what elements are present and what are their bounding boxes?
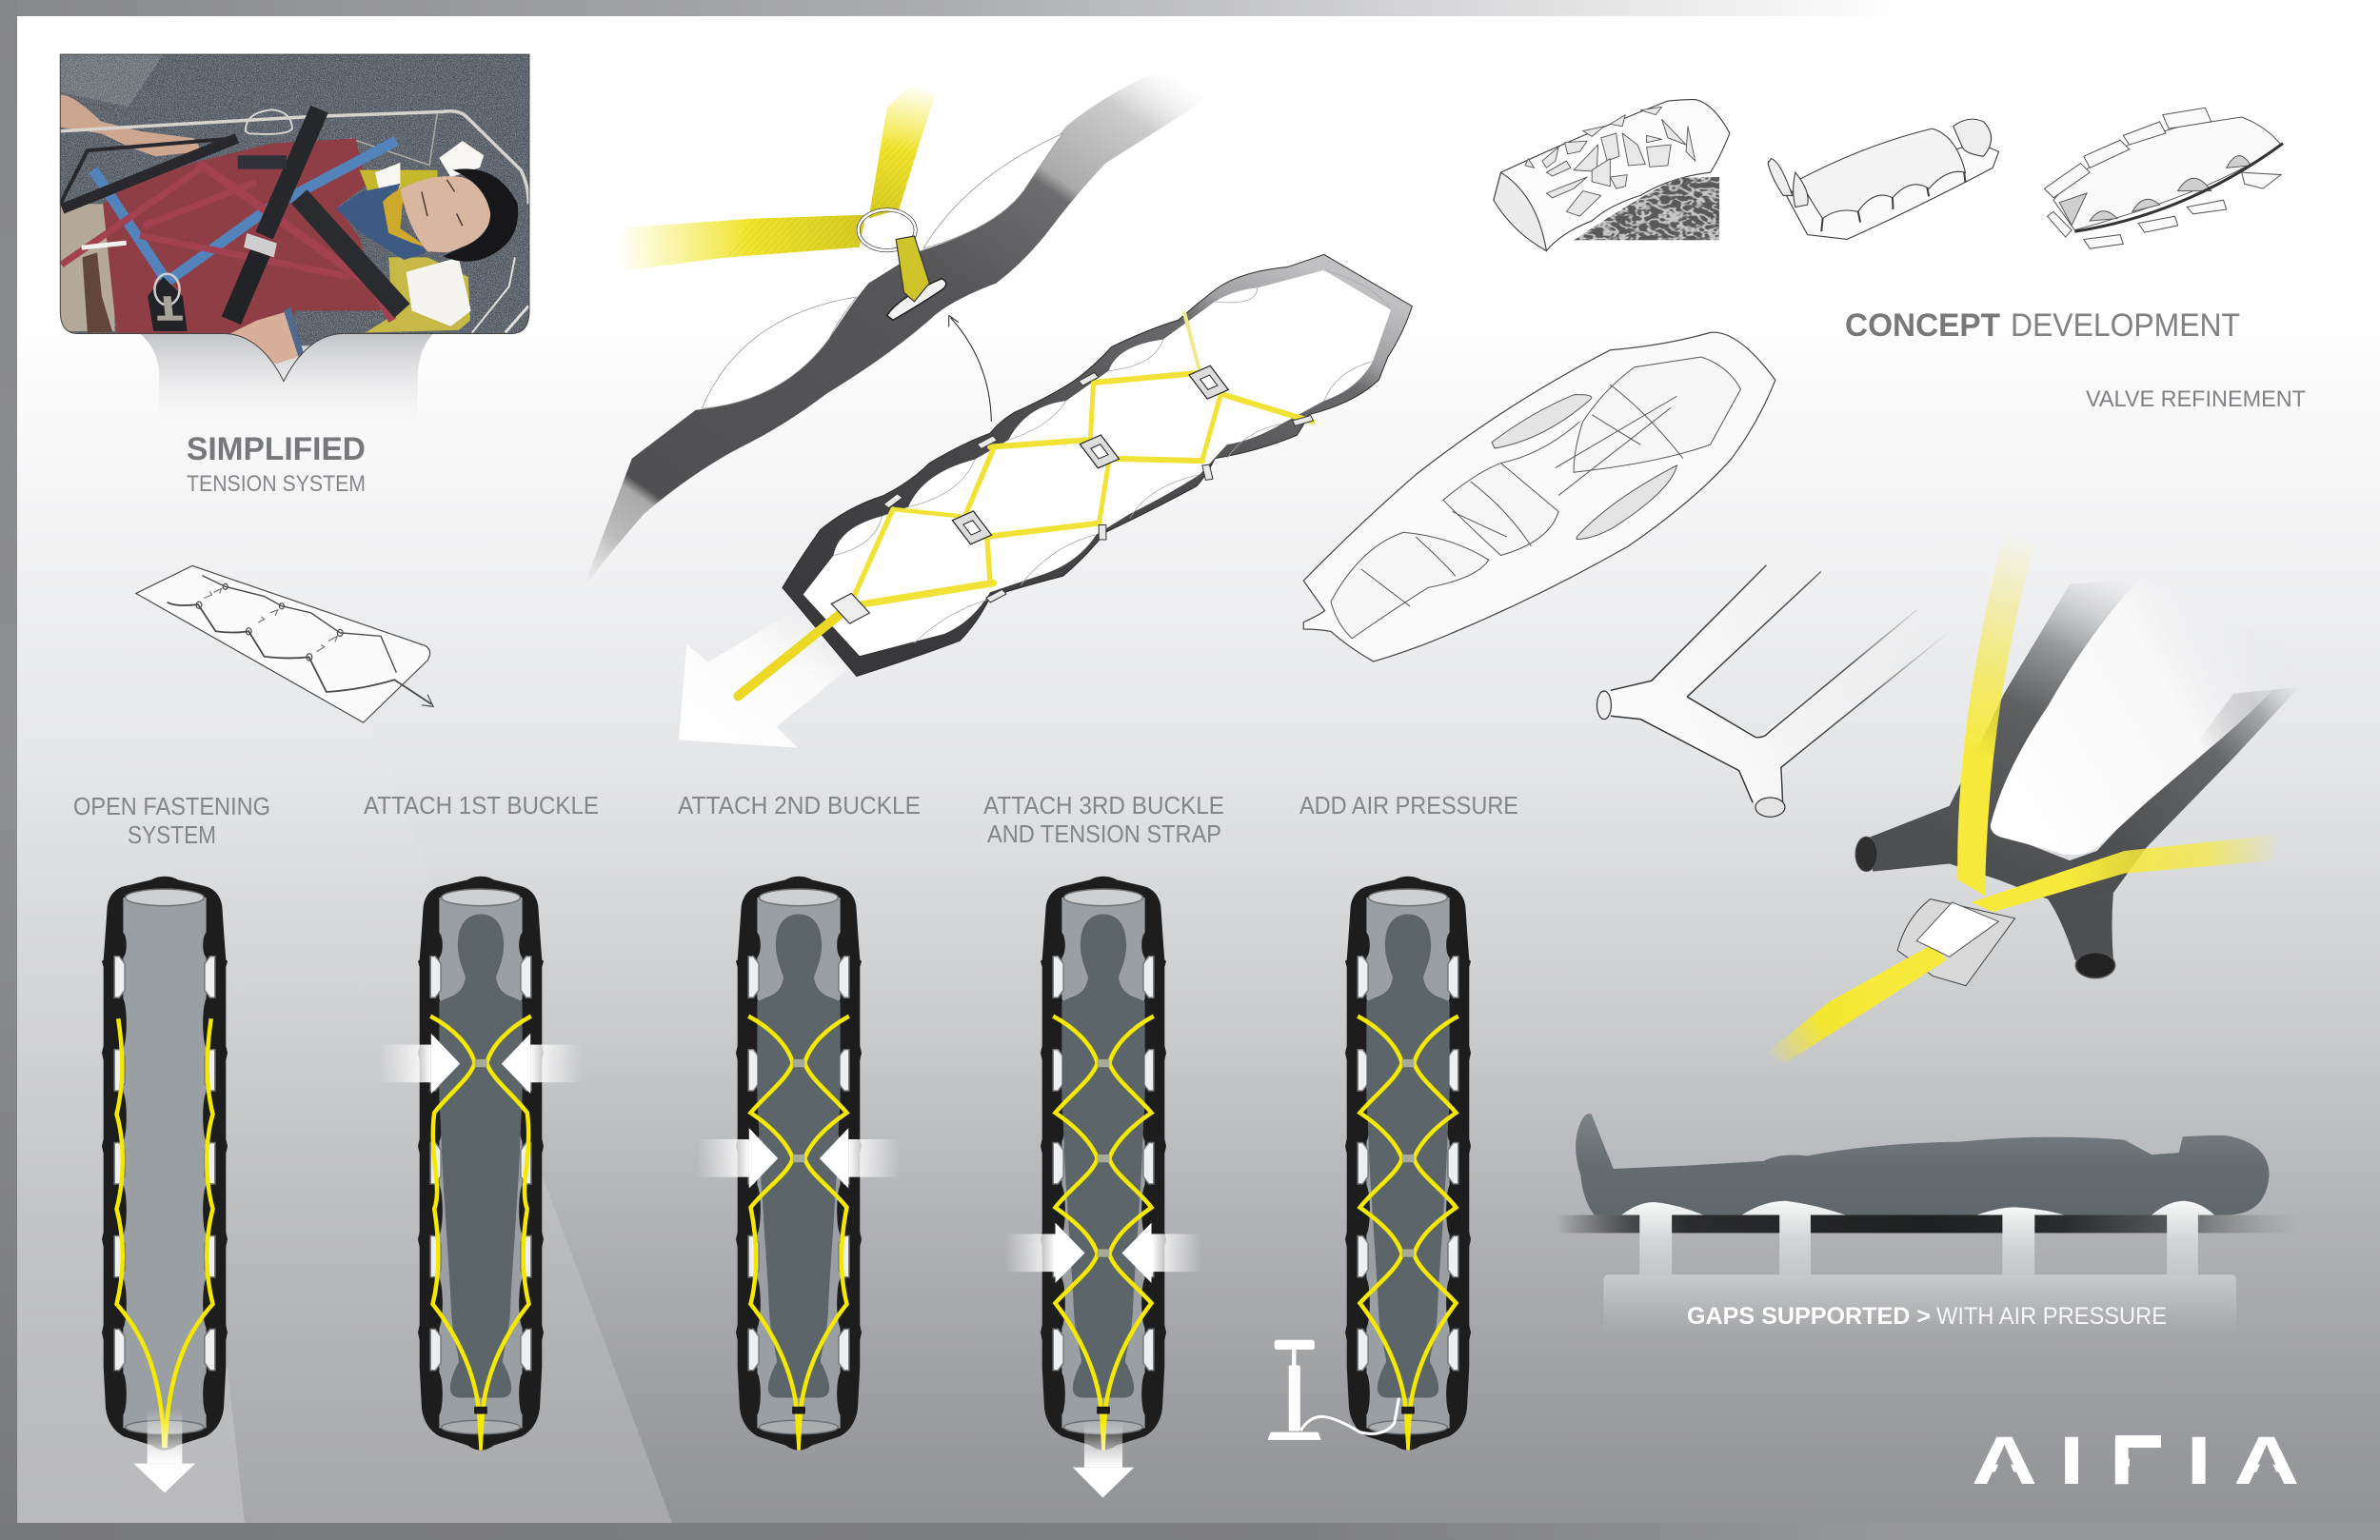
valve openings	[1855, 837, 1877, 872]
strap slot	[887, 279, 946, 320]
step labels: ATTACH 1ST BUCKLE	[364, 791, 599, 819]
sketch: valve frame corner	[1597, 565, 1953, 817]
yellow strap horizontal	[1972, 835, 2277, 912]
yellow strap with one buckle	[430, 1017, 531, 1413]
heading: concept development	[1845, 307, 2240, 344]
white arrow down	[1073, 1421, 1134, 1498]
step labels: AND TENSION STRAP	[987, 819, 1221, 848]
caption: gaps supported with air pressure: GAPS SUPPORTED >	[1687, 1303, 1931, 1330]
concept sketch 1: voronoi sleeve	[1494, 100, 1730, 251]
dark valve frame right arm	[2070, 687, 2299, 893]
photo content	[60, 54, 529, 365]
big white pull arrow	[679, 606, 863, 748]
dark valve frame left arm	[1868, 578, 2146, 960]
frame: top band	[0, 0, 2380, 16]
side view: body silhouette	[1576, 1114, 2270, 1215]
yellow strap with two buckles	[748, 1017, 849, 1413]
diagonal light beam, right	[0, 190, 672, 1523]
step labels: OPEN FASTENING	[73, 792, 270, 820]
inward arrows	[697, 1128, 901, 1189]
logo: AIRIA: AIRIA	[1972, 1423, 2300, 1498]
buckle 3	[1080, 435, 1120, 468]
caption continuation: WITH AIR PRESSURE	[1936, 1303, 2167, 1330]
buckle 1	[831, 593, 869, 623]
concept sketches	[1303, 100, 2283, 661]
step 5: add air pressure	[1345, 877, 1471, 1451]
heading: concept development: DEVELOPMENT	[2011, 307, 2240, 344]
concept sketch 3: tube with strap segments	[2044, 108, 2283, 248]
inward arrows	[379, 1034, 583, 1094]
close-up window arcs	[702, 133, 1063, 408]
yellow straps	[738, 313, 1312, 696]
short strap to slot	[896, 236, 929, 302]
heading: simplified tension system: SIMPLIFIED	[187, 431, 366, 467]
logo: AIRIA	[1973, 1435, 2297, 1485]
sketch: simplified strap diagram	[136, 565, 433, 722]
lens window lines	[834, 270, 1391, 643]
icon: air pump with hose	[1267, 1340, 1399, 1440]
yellow strap with three buckles	[1053, 1017, 1154, 1413]
diagonal light beam, left	[0, 476, 245, 1523]
photo outline	[60, 54, 529, 382]
step 3: attach 2nd buckle	[697, 877, 901, 1451]
side view: air support posts	[1621, 1201, 2214, 1274]
side view: black base bar	[1556, 1215, 2299, 1233]
step labels: SYSTEM	[128, 820, 216, 849]
yellow strap fully tensioned	[1358, 1017, 1458, 1413]
curved arrow	[949, 315, 991, 422]
step 2: attach 1st buckle	[379, 877, 583, 1451]
metal ring	[859, 209, 916, 250]
yellow strap lower tail	[1766, 944, 1947, 1063]
step labels: ADD AIR PRESSURE	[1299, 791, 1518, 819]
yellow strap open	[116, 1018, 213, 1448]
close-up dark frame band	[584, 75, 1245, 587]
buckle 4	[1189, 365, 1228, 399]
panel: photo of current strapping system	[60, 54, 529, 437]
heading: simplified tension system	[187, 431, 366, 497]
sleeve material texture swatch	[1574, 177, 1719, 240]
side view: air chamber block	[1603, 1274, 2236, 1333]
white arrow down	[133, 1409, 195, 1493]
concept sketch 2: covered body on board	[1768, 119, 1999, 239]
label: valve refinement: VALVE REFINEMENT	[2086, 386, 2306, 412]
step 1: open fastening system	[102, 877, 228, 1493]
yellow strap left hatching	[723, 215, 865, 258]
white cushion	[1991, 578, 2305, 855]
buckle 2	[952, 511, 992, 544]
step 4: attach 3rd buckle and tension strap	[1004, 877, 1202, 1498]
frame strap slots	[883, 372, 1313, 602]
yellow strap top	[869, 85, 936, 219]
step labels: ATTACH 2ND BUCKLE	[678, 791, 921, 819]
stretcher interior	[803, 270, 1391, 656]
yellow strap left	[617, 215, 865, 271]
step labels: ATTACH 3RD BUCKLE	[983, 791, 1224, 819]
heading: concept development: CONCEPT	[1845, 307, 2000, 344]
cam buckle	[1897, 899, 2015, 986]
buckle cover	[1916, 902, 1998, 957]
inward arrows	[1004, 1223, 1202, 1283]
frame: left band	[0, 0, 17, 1540]
hero illustration: close-up of strap and ring on frame	[584, 75, 1412, 748]
yellow strap vertical	[1957, 533, 2034, 896]
stretcher frame dark	[783, 254, 1412, 676]
sketch: inflated cushion body bag	[1303, 332, 1775, 661]
shadow below photo	[140, 334, 433, 437]
frame: bottom band	[0, 1523, 2380, 1540]
yellow strap top hatching	[869, 140, 921, 219]
step labels	[73, 791, 1518, 849]
valve and buckle illustrations	[1556, 533, 2305, 1333]
heading: simplified tension system: TENSION SYSTEM	[187, 471, 366, 497]
